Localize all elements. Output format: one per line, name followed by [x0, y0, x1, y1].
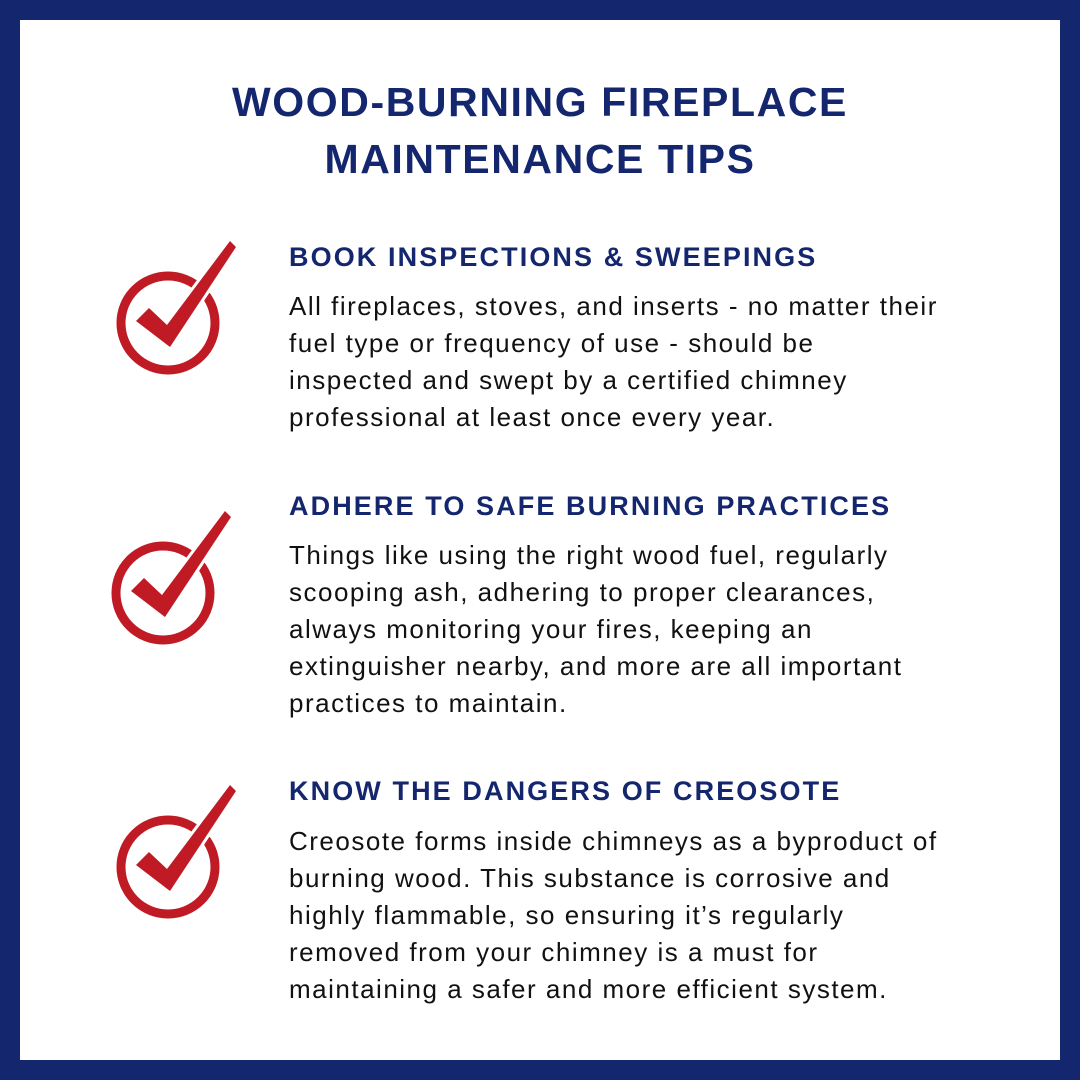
body 3: maintaining a safer and more efficient system.	[289, 974, 888, 1004]
body 1: All fireplaces, stoves, and inserts - no matter their	[289, 291, 938, 321]
body 3: highly flammable, so ensuring it’s regularly	[289, 900, 844, 930]
icon: check 3	[121, 785, 236, 914]
body 1: fuel type or frequency of use - should be	[289, 328, 814, 358]
body 3: removed from your chimney is a must for	[289, 937, 819, 967]
body 1: professional at least once every year.	[289, 402, 775, 432]
body 2: always monitoring your fires, keeping an	[289, 614, 813, 644]
heading 3: KNOW THE DANGERS OF CREOSOTE	[289, 776, 841, 806]
body 2: scooping ash, adhering to proper clearances,	[289, 577, 875, 607]
body 2: practices to maintain.	[289, 688, 568, 718]
body 1	[289, 291, 938, 432]
body 3: Creosote forms inside chimneys as a byproduct of	[289, 826, 938, 856]
body 3: burning wood. This substance is corrosive and	[289, 863, 891, 893]
body 2: Things like using the right wood fuel, regularly	[289, 540, 889, 570]
title	[232, 79, 848, 182]
icon: check 2	[116, 511, 231, 640]
title: MAINTENANCE TIPS	[324, 136, 756, 182]
body 2: extinguisher nearby, and more are all important	[289, 651, 902, 681]
body 1: inspected and swept by a certified chimney	[289, 365, 848, 395]
body 2	[289, 540, 902, 718]
body 3	[289, 826, 938, 1004]
title: WOOD-BURNING FIREPLACE	[232, 79, 848, 125]
heading 1: BOOK INSPECTIONS & SWEEPINGS	[289, 242, 817, 272]
heading 2: ADHERE TO SAFE BURNING PRACTICES	[289, 491, 891, 521]
icon: check 1	[121, 241, 236, 370]
